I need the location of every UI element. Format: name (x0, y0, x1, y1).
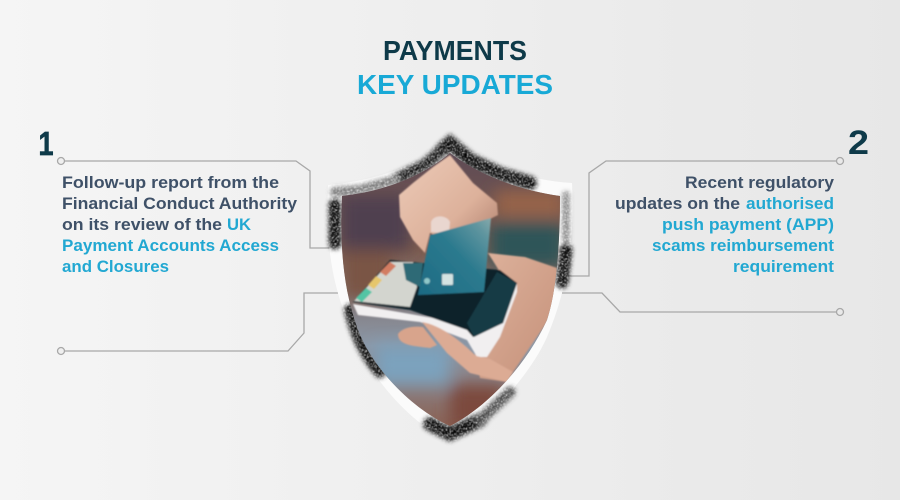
text block: item 2: requirement (733, 257, 834, 276)
teal keys (403, 263, 423, 287)
text block: item 2: Recent regulatory (685, 173, 835, 192)
shield white frame (328, 135, 573, 442)
card chip (442, 274, 453, 285)
terminal white body (353, 283, 517, 357)
upper hand (399, 155, 498, 253)
photo: payment terminal and card (335, 150, 565, 430)
photo background (335, 150, 565, 430)
title (357, 35, 553, 100)
terminal side buttons (467, 272, 517, 337)
text block: item 1: Payment Accounts Access (62, 236, 279, 255)
text block: item 2 (615, 173, 835, 276)
upper hand thumbnail (431, 216, 450, 234)
title: PAYMENTS (383, 35, 527, 66)
text block: item 2: authorised (746, 194, 834, 213)
shield (328, 135, 573, 442)
text block: item 1: UK (227, 215, 252, 234)
number 1: 1 (38, 125, 54, 162)
text block: item 1: Financial Conduct Authority (62, 194, 298, 213)
text block: item 1: on its review of the (62, 215, 222, 234)
number 2: 2 (848, 124, 869, 162)
text block: item 1 (62, 173, 298, 276)
text block: item 1: and Closures (62, 257, 169, 276)
title: KEY UPDATES (357, 69, 553, 100)
text block: item 2: scams reimbursement (652, 236, 834, 255)
card (418, 218, 491, 295)
terminal keypad (354, 262, 417, 307)
shield grunge edges (335, 143, 566, 434)
lower hand palm (470, 253, 558, 382)
connector lines (58, 158, 844, 354)
lower hand fingers (422, 322, 513, 382)
terminal dark top (353, 260, 517, 337)
text block: item 1: Follow-up report from the (62, 173, 279, 192)
text block: item 2: updates on the (615, 194, 740, 213)
card contactless mark (424, 278, 430, 284)
text block: item 2: push payment (APP) (662, 215, 834, 234)
